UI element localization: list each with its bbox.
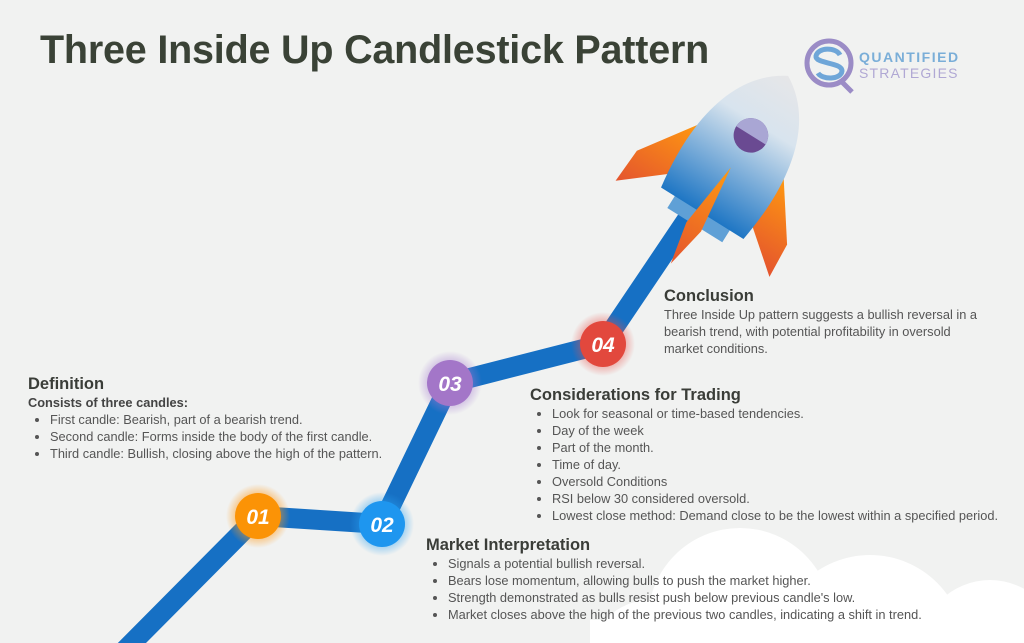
markers: 04 [591,334,615,357]
panel: considerations: Time of day. [552,457,621,472]
markers [226,312,635,556]
panel: conclusion: Conclusion [664,287,754,305]
panel: definition [28,375,382,461]
logo [807,41,960,92]
panel: market interpretation: Bears lose momentum, allowing bulls to push the market higher. [448,573,811,588]
panel: considerations: RSI below 30 considered oversold. [552,491,750,506]
panel: considerations: Lowest close method: Demand close to be the lowest within a specified period. [552,508,998,523]
panel: considerations: Oversold Conditions [552,474,667,489]
panel: definition: Definition [28,375,104,393]
panel: considerations: Considerations for Trading [530,386,741,404]
panel: market interpretation: Market Interpretation [426,536,590,554]
rocket [594,28,865,312]
panel: market interpretation: Market closes above the high of the previous two candles, indicating a shift in trend. [448,607,922,622]
panel: considerations [530,386,998,523]
panel: conclusion: Three Inside Up pattern suggests a bullish reversal in a bearish trend, with potential profitability in oversold market conditions. [664,307,977,356]
panel: definition: Third candle: Bullish, closing above the high of the pattern. [50,446,382,461]
logo: STRATEGIES [859,65,959,81]
panel: market interpretation: Signals a potential bullish reversal. [448,556,645,571]
panel: definition: Second candle: Forms inside the body of the first candle. [50,429,372,444]
panel: considerations: Part of the month. [552,440,654,455]
markers: 02 [370,514,394,537]
panel: definition: Consists of three candles: [28,395,188,410]
panel: market interpretation [426,536,922,622]
markers: 01 [246,506,270,529]
panel: considerations: Day of the week [552,423,644,438]
panel: considerations: Look for seasonal or time-based tendencies. [552,406,804,421]
panel: definition: First candle: Bearish, part of a bearish trend. [50,412,303,427]
logo: QUANTIFIED [859,49,960,65]
title: Three Inside Up Candlestick Pattern [40,28,709,72]
cloud [590,528,1024,643]
markers: 03 [438,373,462,396]
panel: market interpretation: Strength demonstrated as bulls resist push below previous candle's low. [448,590,855,605]
path line [120,200,700,643]
